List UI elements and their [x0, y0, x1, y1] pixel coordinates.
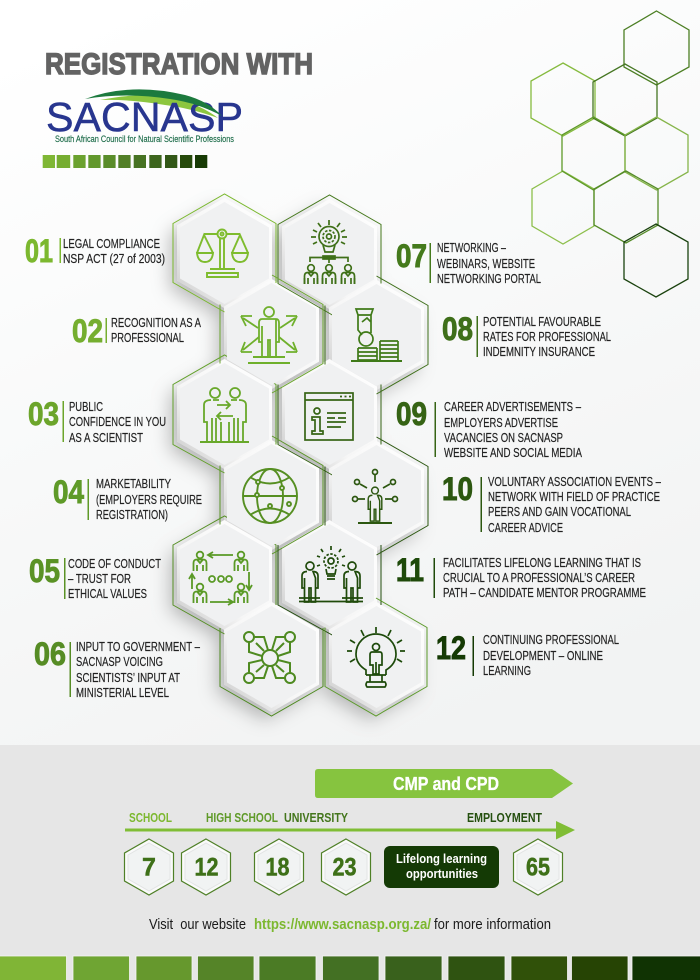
lifelong learning box — [384, 846, 499, 888]
website line: for more information — [434, 916, 551, 933]
icon: person with four arrows — [241, 307, 297, 363]
hexagon honeycomb panel — [173, 194, 428, 716]
icon: hand placing coin on stacks — [351, 309, 402, 361]
item 12: continuing professional development: LEARNING — [483, 663, 531, 678]
item 11: lifelong learning — [396, 552, 646, 600]
icon: globe — [243, 469, 297, 523]
item 01: legal compliance — [25, 233, 165, 269]
timeline arrow — [125, 821, 575, 840]
item 05: code of conduct: CODE OF CONDUCT — [68, 556, 161, 571]
item 10: voluntary association events: CAREER ADVICE — [488, 520, 563, 535]
item 12: continuing professional development: DEVELOPMENT – ONLINE — [483, 648, 603, 663]
item 03: public confidence: CONFIDENCE IN YOU — [69, 414, 166, 429]
item 02: recognition: 02 — [72, 313, 103, 349]
footer colour blocks — [0, 956, 700, 980]
website line: Visit our website — [149, 916, 246, 933]
title: REGISTRATION WITH — [45, 48, 313, 81]
item 07: networking — [396, 238, 541, 286]
item 09: career advertisements: WEBSITE AND SOCIAL MEDIA — [444, 445, 582, 460]
icon: gear between two people — [299, 546, 363, 602]
item 08: indemnity insurance: INDEMNITY INSURANCE — [483, 344, 595, 359]
item 05: code of conduct — [29, 553, 161, 601]
item 09: career advertisements: EMPLOYERS ADVERTISE — [444, 415, 558, 430]
timeline stage labels: HIGH SCHOOL — [206, 810, 278, 825]
item 07: networking: NETWORKING PORTAL — [437, 271, 541, 286]
item 04: marketability — [53, 474, 202, 522]
icon: person inside light bulb — [347, 627, 405, 687]
timeline stage labels — [129, 810, 542, 825]
item 09: career advertisements: 09 — [396, 396, 427, 432]
age hexagons — [124, 839, 562, 895]
item 03: public confidence: PUBLIC — [69, 399, 103, 414]
item 07: networking: 07 — [396, 238, 427, 274]
item 07: networking: NETWORKING – — [437, 240, 507, 255]
age hexagons: 65 — [526, 854, 550, 882]
item 01: legal compliance: NSP ACT (27 of 2003) — [63, 251, 165, 266]
item 03: public confidence: AS A SCIENTIST — [69, 430, 143, 445]
item 06: input to government: SACNASP VOICING — [76, 654, 163, 669]
item 06: input to government: 06 — [34, 636, 66, 672]
SACNASP logo: South African Council for Natural Scientific Professions — [55, 133, 234, 144]
item 03: public confidence: 03 — [28, 396, 59, 432]
item 04: marketability: (EMPLOYERS REQUIRE — [96, 492, 202, 507]
icon: scales of justice — [197, 230, 248, 277]
website line — [149, 916, 551, 933]
page background — [0, 0, 700, 745]
item 12: continuing professional development: 12 — [436, 630, 466, 666]
lifelong learning box: opportunities — [406, 866, 478, 881]
icon: ideas and team — [304, 220, 354, 284]
item 02: recognition: PROFESSIONAL — [111, 330, 184, 345]
item 08: indemnity insurance: 08 — [442, 311, 473, 347]
item 09: career advertisements — [396, 396, 582, 460]
item 06: input to government: SCIENTISTS’ INPUT AT — [76, 670, 180, 685]
item 11: lifelong learning: 11 — [396, 552, 424, 588]
item 09: career advertisements: CAREER ADVERTISEMENTS – — [444, 399, 582, 414]
lifelong learning box: Lifelong learning — [396, 851, 487, 866]
item 10: voluntary association events: PEERS AND GAIN VOCATIONAL — [488, 504, 631, 519]
decorative hexagon cluster — [531, 11, 689, 297]
age hexagons: 18 — [266, 854, 290, 882]
item 09: career advertisements: VACANCIES ON SACNASP — [444, 430, 563, 445]
item 04: marketability: MARKETABILITY — [96, 476, 171, 491]
item 01: legal compliance: 01 — [25, 233, 53, 269]
timeline stage labels: UNIVERSITY — [284, 810, 348, 825]
item 10: voluntary association events — [442, 471, 662, 535]
SACNASP logo: SACNASP — [46, 94, 243, 140]
item 06: input to government: MINISTERIAL LEVEL — [76, 685, 169, 700]
item 08: indemnity insurance — [442, 311, 611, 359]
colour swatch strip — [43, 155, 207, 168]
item 03: public confidence — [28, 396, 166, 445]
timeline stage labels: EMPLOYMENT — [467, 810, 542, 825]
item 02: recognition: RECOGNITION AS A — [111, 315, 201, 330]
item 12: continuing professional development: CONTINUING PROFESSIONAL — [483, 632, 619, 647]
icon: people around a table — [244, 632, 295, 683]
item 01: legal compliance: LEGAL COMPLIANCE — [63, 236, 160, 251]
item 05: code of conduct: ETHICAL VALUES — [68, 586, 147, 601]
age hexagons: 23 — [332, 854, 356, 882]
icon: two people exchanging — [200, 388, 249, 442]
age hexagons: 12 — [194, 854, 218, 882]
arrow banner: CMP and CPD: CMP and CPD — [393, 774, 499, 794]
website line: https://www.sacnasp.org.za/ — [254, 916, 432, 933]
item 04: marketability: 04 — [53, 474, 84, 510]
icon: team cycle — [189, 552, 252, 605]
item 05: code of conduct: 05 — [29, 553, 60, 589]
item 11: lifelong learning: CRUCIAL TO A PROFESSIONAL’S CAREER — [443, 570, 635, 585]
bottom grey band — [0, 745, 700, 980]
icon: info web page — [305, 393, 353, 440]
item 07: networking: WEBINARS, WEBSITE — [437, 256, 535, 271]
item 06: input to government: INPUT TO GOVERNMENT – — [76, 639, 201, 654]
timeline stage labels: SCHOOL — [129, 810, 172, 825]
item 08: indemnity insurance: RATES FOR PROFESSIONAL — [483, 329, 611, 344]
item 02: recognition — [72, 313, 201, 349]
arrow banner: CMP and CPD — [315, 769, 573, 798]
item 10: voluntary association events: 10 — [442, 471, 473, 507]
item 05: code of conduct: – TRUST FOR — [68, 571, 131, 586]
item 12: continuing professional development — [436, 630, 619, 678]
item 06: input to government — [34, 636, 201, 700]
age hexagons: 7 — [142, 854, 156, 882]
icon: person with network nodes — [352, 470, 398, 523]
item 08: indemnity insurance: POTENTIAL FAVOURABLE — [483, 314, 601, 329]
item 04: marketability: REGISTRATION) — [96, 507, 168, 522]
